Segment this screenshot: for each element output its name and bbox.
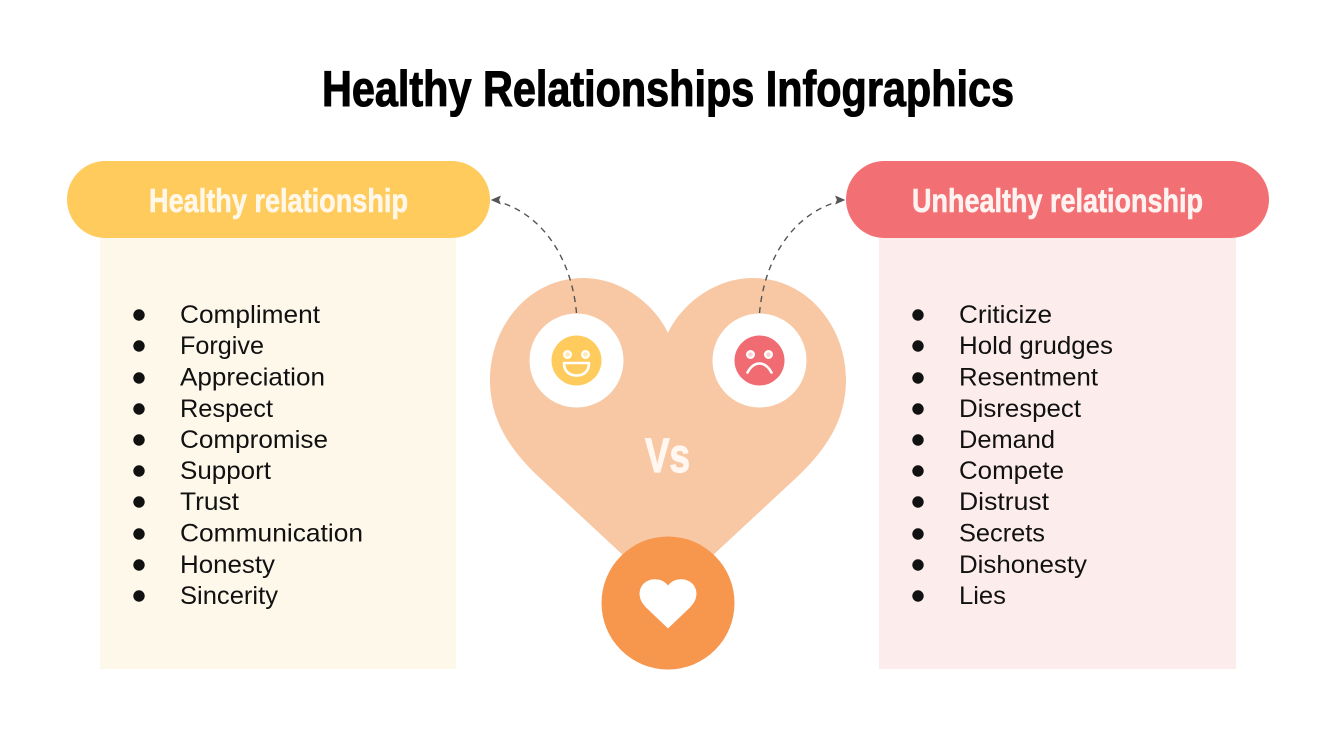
arrow: to unhealthy (760, 196, 844, 313)
unhealthy list: Secrets (959, 520, 1045, 548)
healthy list: Honesty (180, 551, 276, 579)
healthy list: Compromise (180, 426, 328, 454)
healthy heading: Healthy relationship (149, 182, 408, 219)
panel: healthy relationship (67, 161, 490, 669)
unhealthy list: Resentment (959, 364, 1098, 392)
arrow: to healthy (492, 196, 576, 313)
unhealthy list: Compete (959, 457, 1064, 485)
unhealthy heading: Unhealthy relationship (912, 182, 1203, 219)
unhealthy list: Distrust (959, 488, 1049, 516)
unhealthy heading pill (846, 161, 1269, 238)
icon: sad face (712, 314, 806, 408)
healthy list (133, 301, 363, 610)
unhealthy list background (879, 230, 1236, 669)
healthy list: Communication (180, 520, 363, 548)
unhealthy list: Criticize (959, 301, 1052, 329)
unhealthy list: Dishonesty (959, 551, 1088, 579)
healthy heading pill (67, 161, 490, 238)
healthy list: Respect (180, 395, 273, 423)
vs label: Vs (645, 430, 690, 483)
heart shape (490, 278, 846, 597)
healthy list: Support (180, 457, 271, 485)
unhealthy list: Hold grudges (959, 332, 1113, 360)
unhealthy list: Disrespect (959, 395, 1081, 423)
healthy list: Compliment (180, 301, 320, 329)
icon: happy face (530, 314, 624, 408)
healthy list: Appreciation (180, 364, 325, 392)
healthy list background (100, 230, 456, 669)
icon: heart badge (602, 536, 734, 670)
unhealthy list: Demand (959, 426, 1055, 454)
title: Healthy Relationships Infographics (322, 61, 1014, 117)
unhealthy list: Lies (959, 582, 1006, 610)
healthy list: Forgive (180, 332, 264, 360)
healthy list: Sincerity (180, 582, 278, 610)
panel: unhealthy relationship (846, 161, 1269, 669)
unhealthy list (912, 301, 1113, 610)
healthy list: Trust (180, 488, 239, 516)
